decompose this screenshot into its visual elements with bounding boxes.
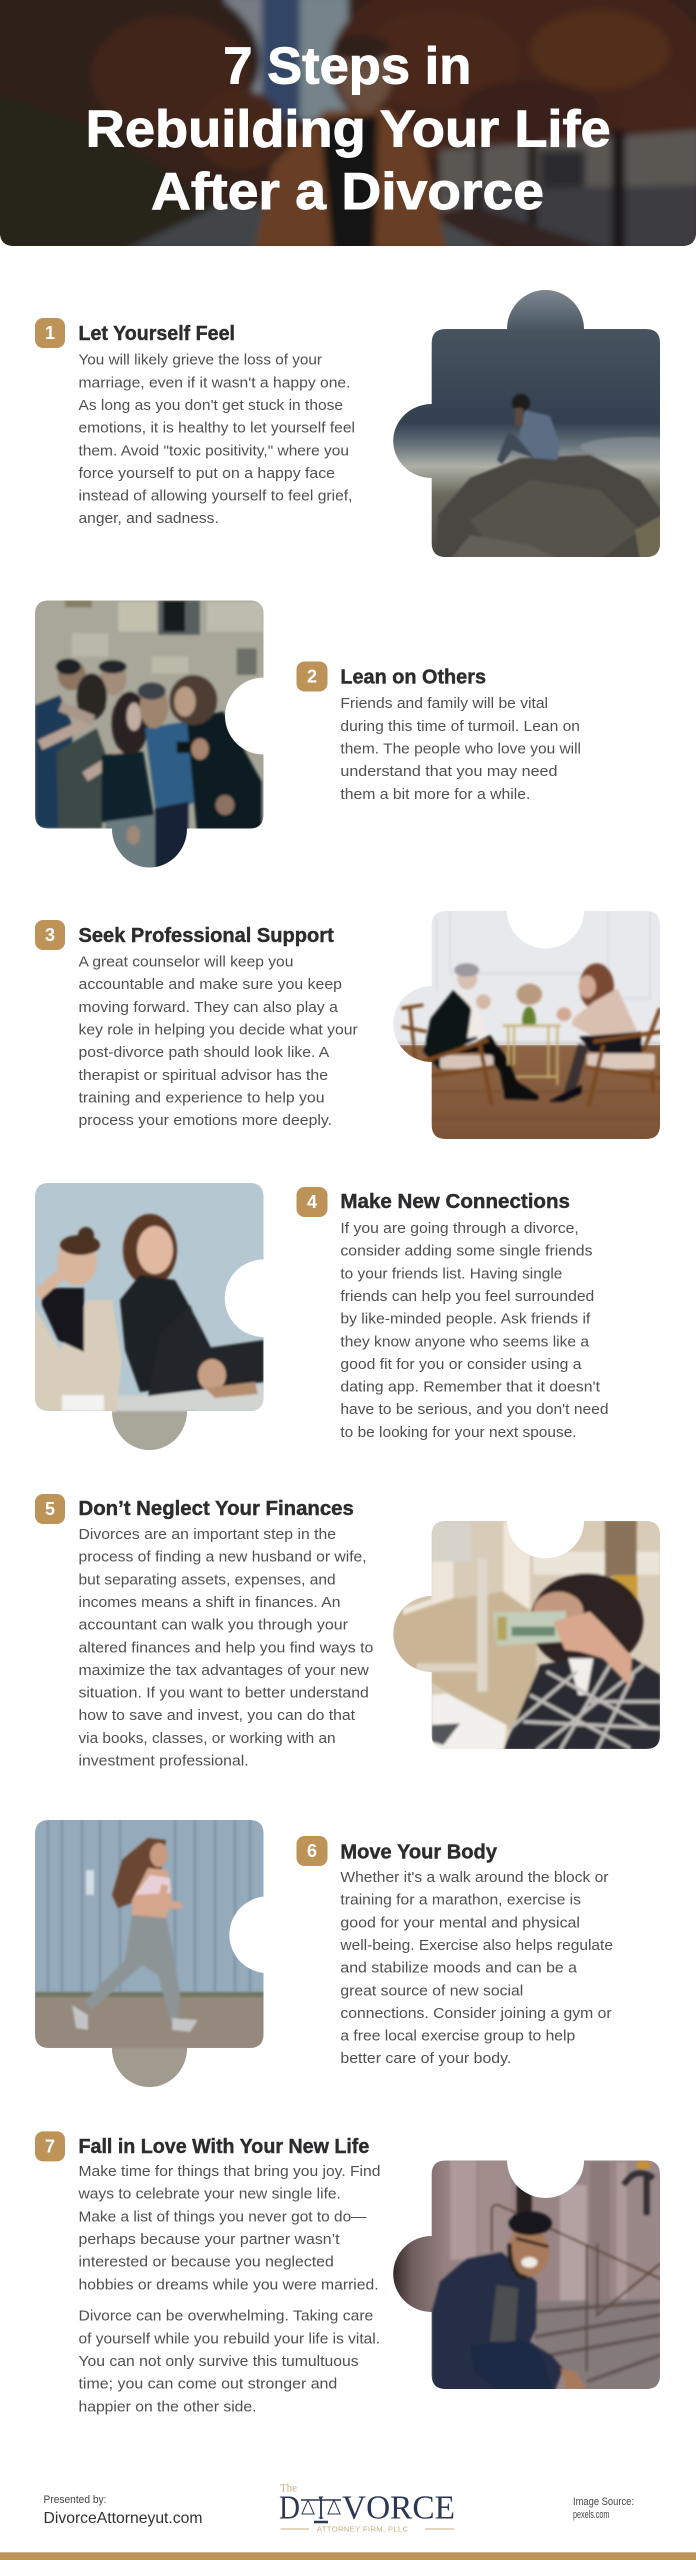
badge 3: 3 [45,925,55,945]
footer [44,2481,634,2534]
text block 7: Make time for things that bring you joy. Find [78,2163,380,2180]
text block 7: Make a list of things you never got to do— [78,2208,367,2225]
text block 6: great source of new social [340,1982,523,1999]
photo: group selfie [30,595,270,875]
panel: step 2 [30,595,581,875]
text block 4: If you are going through a divorce, [340,1220,579,1237]
heading 1: Let Yourself Feel [78,323,235,345]
text block 7: happier on the other side. [78,2398,256,2415]
text block 6: training for a marathon, exercise is [340,1892,581,1909]
hero photo [0,0,696,260]
heading 7: Fall in Love With Your New Life [78,2136,369,2158]
photo: man on rock [393,290,660,557]
presented by: DivorceAttorneyut.com [44,2510,202,2527]
text block 3: process your emotions more deeply. [78,1112,332,1129]
text block 7: interested or because you neglected [78,2254,334,2271]
text block 7: time; you can come out stronger and [78,2376,337,2393]
text block 5: but separating assets, expenses, and [78,1571,336,1588]
text block 5: Divorces are an important step in the [78,1526,336,1543]
text block 6 [339,1869,613,2067]
heading 2: Lean on Others [340,666,486,688]
bottom bar [0,2552,696,2560]
photo: woman running [30,1815,270,2093]
presented by: Presented by: [44,2494,106,2506]
badge 6 [296,1836,328,1866]
panel: step 7 [35,2131,667,2415]
text block 1: You will likely grieve the loss of your [78,352,322,369]
title: After a Divorce [151,163,544,221]
text block 3: A great counselor will keep you [78,954,293,970]
badge 1: 1 [45,323,55,343]
text block 1: them. Avoid "toxic positivity," where you [78,442,349,459]
text block 1: marriage, even if it wasn't a happy one. [78,374,350,391]
text block 4: to be looking for your next spouse. [340,1424,577,1441]
text block 3: moving forward. They can also play a [78,999,338,1016]
text block 2 [340,695,581,803]
text block 7: hobbies or dreams while you were married. [78,2276,379,2293]
badge 2: 2 [307,666,317,686]
photo: two laughing friends [30,1180,270,1456]
panel: step 3 [35,905,667,1145]
badge 6: 6 [307,1841,317,1861]
badge 3 [35,920,65,950]
text block 4: by like-minded people. Ask friends if [340,1311,591,1328]
text block 7 [77,2163,380,2415]
photo: counseling session [390,905,667,1145]
text block 6: Whether it's a walk around the block or [340,1869,608,1886]
text block 5: how to save and invest, you can do that [78,1707,356,1724]
badge 4: 4 [307,1192,317,1212]
text block 2: during this time of turmoil. Lean on [340,718,580,735]
text block 2: them a bit more for a while. [340,786,530,803]
text block 4: friends can help you feel surrounded [340,1288,594,1305]
panel: step 6 [30,1815,613,2093]
logo: The [280,2481,297,2495]
text block 5 [78,1526,373,1770]
text block 4 [340,1220,608,1441]
photo: man laughing on steps [390,2155,667,2395]
text block 5: incomes means a shift in finances. An [78,1594,340,1611]
text block 5: maximize the tax advantages of your new [78,1662,369,1679]
text block 1: anger, and sadness. [78,510,219,527]
text block 4: dating app. Remember that it doesn't [340,1379,601,1396]
panel: step 1 [35,285,696,560]
text block 3: post-divorce path should look like. A [78,1044,329,1061]
text block 7: of yourself while you rebuild your life is vital. [78,2330,380,2347]
text block 4: to your friends list. Having single [340,1265,562,1282]
badge 7 [35,2131,65,2161]
logo: I [318,2490,324,2526]
title: 7 Steps in [223,38,471,96]
text block 7: Divorce can be overwhelming. Taking care [78,2308,373,2325]
badge 2 [296,662,328,692]
text block 6: well-being. Exercise also helps regulate [339,1937,613,1954]
badge 4 [296,1187,328,1217]
text block 7: perhaps because your partner wasn’t [78,2231,340,2248]
text block 5: via books, classes, or working with an [78,1730,336,1747]
text block 6: and stabilize moods and can be a [340,1960,578,1977]
heading 5: Don’t Neglect Your Finances [78,1498,354,1520]
text block 1: As long as you don't get stuck in those [78,397,343,414]
badge 1 [35,318,65,348]
panel: step 4 [30,1180,608,1456]
hero banner [0,0,696,260]
title [86,38,611,221]
text block 5: situation. If you want to better understand [78,1685,369,1702]
text block 3 [78,954,358,1129]
image source [573,2496,634,2521]
text block 3: key role in helping you decide what your [78,1022,358,1038]
badge 5: 5 [45,1499,55,1519]
image source: pexels.com [573,2509,609,2521]
image source: Image Source: [573,2496,634,2508]
logo: ATTORNEY FIRM, PLLC [317,2524,409,2534]
heading 4: Make New Connections [340,1191,570,1213]
text block 4: they know anyone who seems like a [340,1333,590,1350]
text block 2: understand that you may need [340,763,557,780]
text block 3: training and experience to help you [78,1089,324,1106]
badge 7: 7 [45,2136,55,2156]
logo [279,2481,455,2534]
text block 5: process of finding a new husband or wife, [78,1549,367,1566]
photo: woman holding dollar bill [390,1515,667,1755]
text block 3: therapist or spiritual advisor has the [78,1067,328,1084]
text block 2: Friends and family will be vital [340,695,548,712]
title: Rebuilding Your Life [86,100,611,158]
text block 4: consider adding some single friends [340,1243,592,1260]
badge 5 [35,1494,65,1524]
text block 5: investment professional. [78,1752,249,1770]
text block 1: emotions, it is healthy to let yourself feel [78,420,355,437]
text block 1: instead of allowing yourself to feel grief, [78,488,352,505]
logo: VORCE [342,2490,455,2526]
text block 1: force yourself to put on a happy face [78,465,335,482]
text block 4: have to be serious, and you don't need [340,1401,608,1418]
text block 5: accountant can walk you through your [78,1617,348,1634]
text block 6: better care of your body. [340,2050,511,2067]
panel: step 5 [35,1494,667,1770]
text block 1 [78,352,355,527]
logo: D [279,2490,300,2526]
text block 4: good fit for you or consider using a [340,1356,582,1373]
icon: scales of justice [301,2498,341,2522]
text block 6: connections. Consider joining a gym or [340,2005,612,2022]
heading 6: Move Your Body [340,1842,498,1864]
presented by [44,2494,202,2527]
heading 3: Seek Professional Support [78,925,334,947]
text block 6: good for your mental and physical [340,1914,580,1931]
text block 6: a free local exercise group to help [340,2028,575,2045]
text block 7: You can not only survive this tumultuous [78,2353,359,2370]
text block 2: them. The people who love you will [340,740,581,758]
text block 7: ways to celebrate your new single life. [77,2186,341,2203]
text block 3: accountable and make sure you keep [78,976,342,993]
text block 5: altered finances and help you find ways to [78,1639,373,1656]
